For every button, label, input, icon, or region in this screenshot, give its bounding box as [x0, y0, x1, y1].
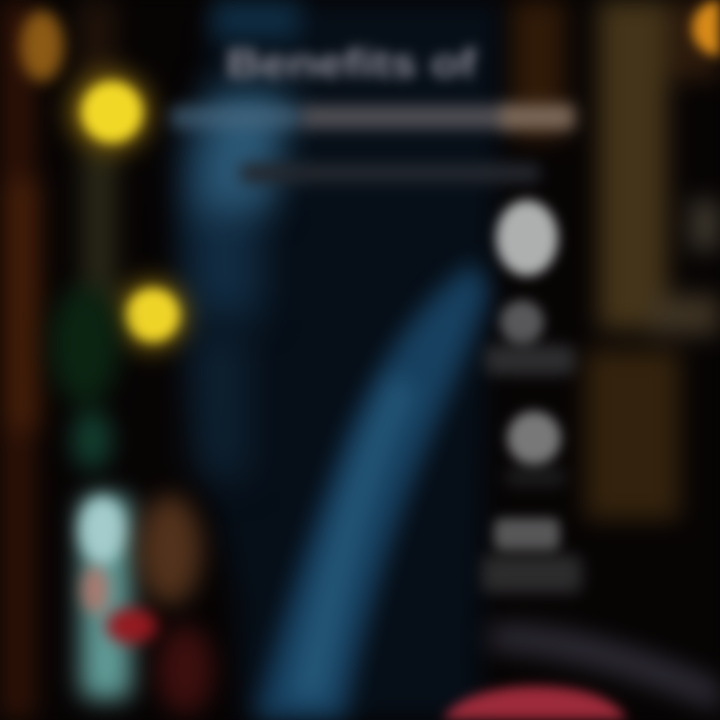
orange bulb left [20, 10, 64, 82]
jeans highlight [255, 262, 490, 720]
subtitle [240, 163, 540, 183]
orange bulb right [692, 0, 720, 56]
icon: fourth [494, 518, 560, 550]
label: third [505, 468, 565, 486]
icon: second [500, 300, 544, 344]
label: fourth [482, 555, 582, 593]
yellow bulb lower [116, 279, 188, 351]
bottom left decor [78, 495, 213, 715]
right wooden panels [510, 0, 720, 520]
icon: third [507, 411, 561, 465]
label: second [485, 345, 575, 375]
left wooden column [0, 0, 116, 720]
jeans figure [178, 0, 500, 720]
bottom right furniture [443, 624, 720, 720]
heading line 1: Benefits of [226, 40, 476, 86]
heading line 2 [300, 105, 510, 129]
string lights [20, 0, 720, 351]
greenery [50, 285, 120, 470]
title bands [170, 40, 575, 183]
icon column [482, 200, 582, 593]
icon: top bulb [496, 200, 558, 276]
yellow bulb top [68, 70, 152, 154]
